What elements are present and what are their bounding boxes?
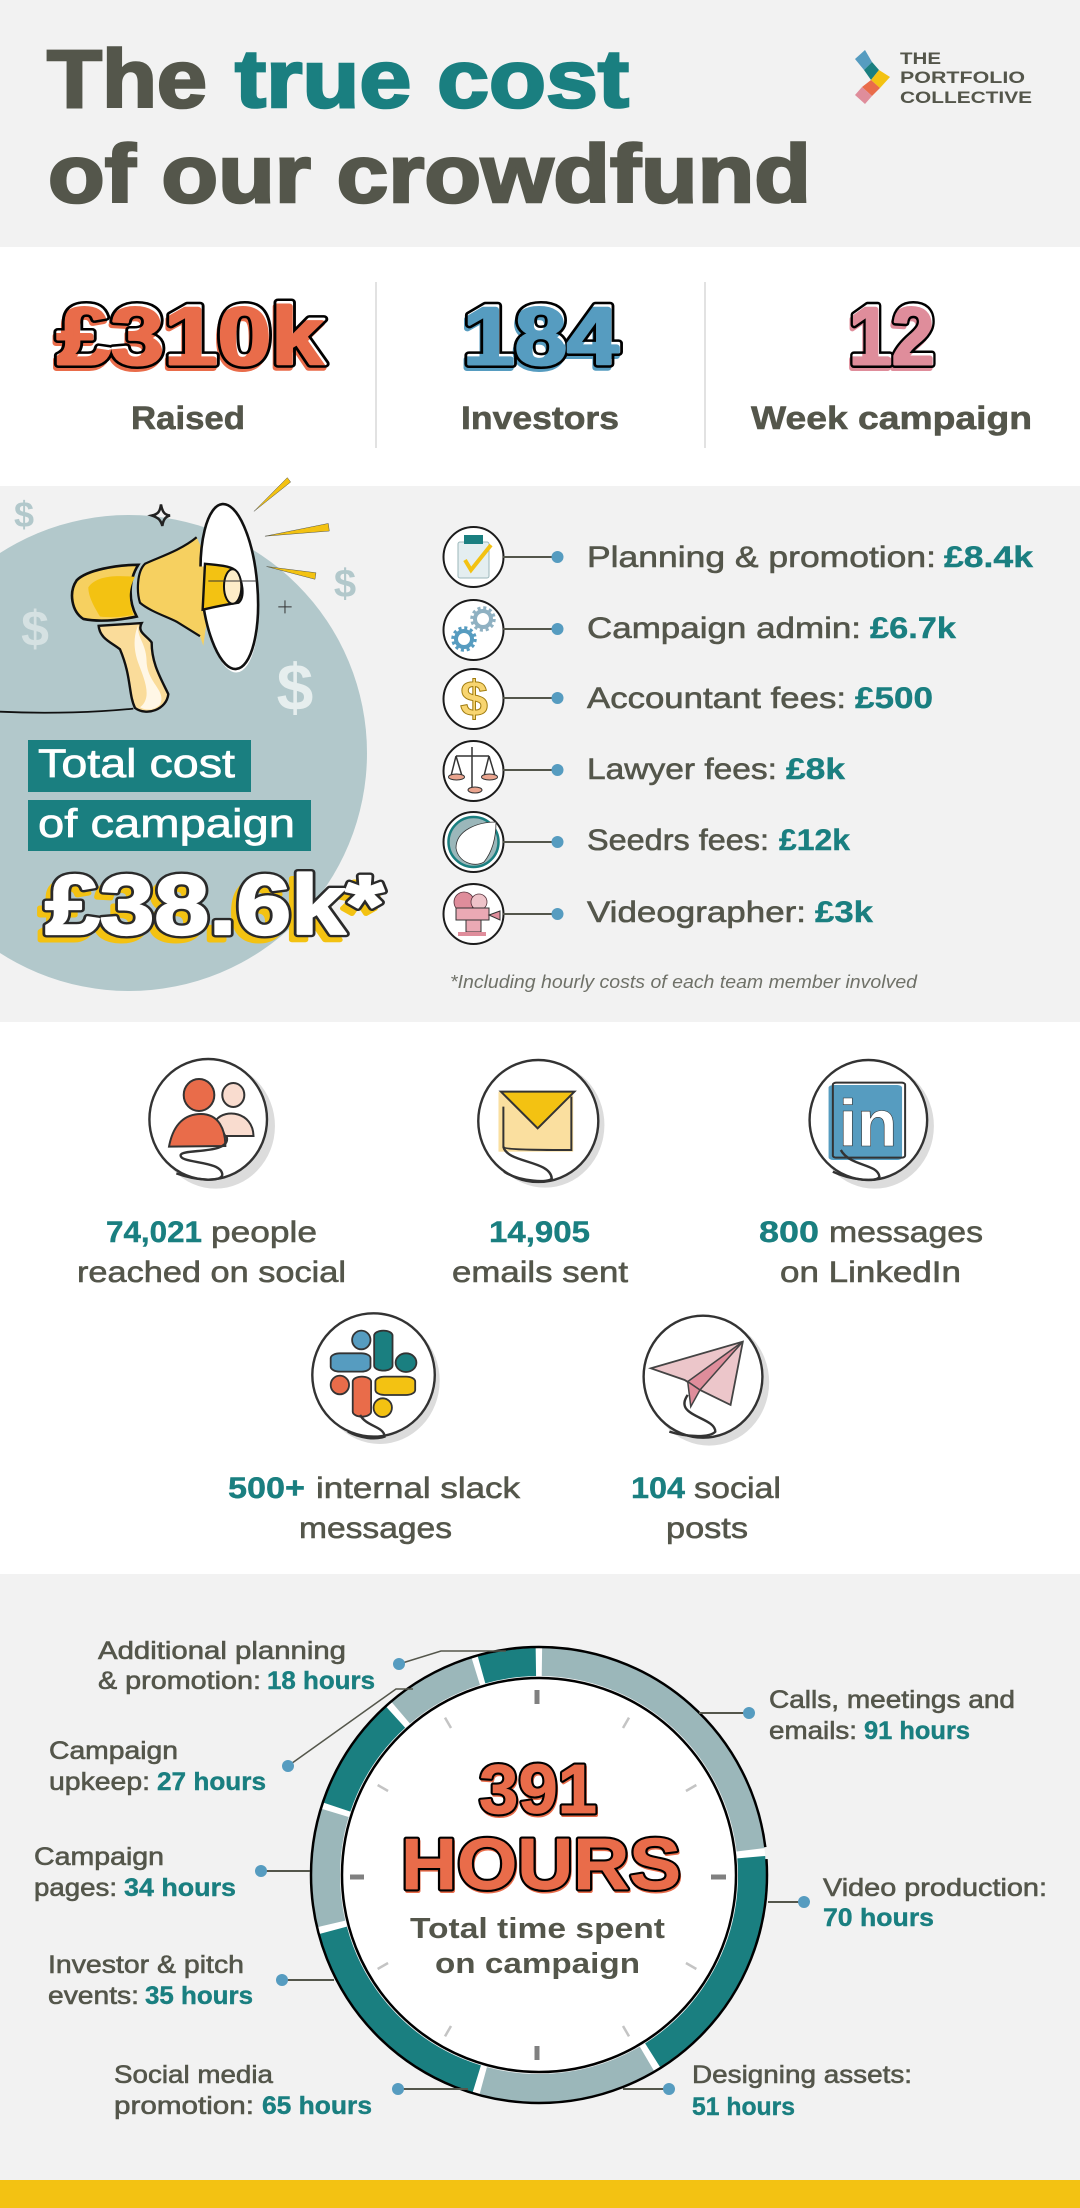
list: lawyer fees: Lawyer fees: xyxy=(587,753,777,786)
logo: The Portfolio Collective xyxy=(855,49,1032,107)
stat: weeks: 12 xyxy=(847,292,933,386)
list: accountant fees xyxy=(444,669,933,729)
icon: dollar xyxy=(444,669,504,729)
stat text: social posts: 104 xyxy=(631,1472,685,1505)
title: The xyxy=(47,34,207,125)
stat: investors xyxy=(380,270,700,436)
icon: people xyxy=(149,1059,275,1189)
label: investor events 35 hours: 35 hours xyxy=(145,1982,253,2010)
label: additional planning 18 hours xyxy=(98,1637,506,1695)
icon: paper plane xyxy=(644,1316,769,1446)
icon: email xyxy=(478,1060,604,1188)
label: campaign pages 34 hours: Campaign xyxy=(34,1843,164,1871)
label: additional planning 18 hours: & promotion: xyxy=(98,1667,261,1695)
stat text: slack: messages xyxy=(299,1512,452,1545)
label: social media 65 hours: Social media xyxy=(114,2061,273,2089)
logo: The Portfolio Collective: THE xyxy=(900,49,941,68)
stat: investors: 184 xyxy=(461,292,617,386)
list: campaign admin: £6.7k xyxy=(870,612,956,645)
label: social media 65 hours: 65 hours xyxy=(262,2092,372,2120)
label: social media 65 hours xyxy=(114,2061,468,2120)
list: campaign admin: Campaign admin: xyxy=(587,612,861,645)
list: planning & promotion: Planning & promotion: xyxy=(587,541,936,574)
title: of our crowdfund xyxy=(48,129,811,220)
stat text: people reached: 74,021 xyxy=(106,1216,202,1249)
list: campaign admin xyxy=(444,600,956,660)
list: videographer xyxy=(444,884,873,944)
label: investor events 35 hours: Investor & pitch xyxy=(48,1951,244,1979)
stat text: people reached xyxy=(77,1216,346,1289)
dollar signs xyxy=(14,494,356,724)
list: videographer: Videographer: xyxy=(587,896,806,929)
label: designing 51 hours xyxy=(623,2061,912,2121)
label: campaign upkeep 27 hours: upkeep: xyxy=(49,1768,150,1796)
list: lawyer fees: £8k xyxy=(786,753,845,786)
icon: slack xyxy=(312,1313,440,1444)
label: social media 65 hours: promotion: xyxy=(114,2092,254,2120)
stat text: slack xyxy=(228,1472,521,1545)
icon: seedrs xyxy=(444,812,504,872)
clock centre text: 391 xyxy=(479,1750,597,1828)
logo: The Portfolio Collective: COLLECTIVE xyxy=(900,88,1032,107)
stat text: linkedin: on LinkedIn xyxy=(780,1256,961,1289)
label: campaign upkeep 27 hours: Campaign xyxy=(49,1737,178,1765)
footnote: *Including hourly costs of each team member involved xyxy=(450,972,918,992)
icon: clipboard xyxy=(444,527,504,587)
stat: weeks xyxy=(750,301,1030,436)
clock centre text: 391 xyxy=(480,1752,598,1830)
label: additional planning 18 hours: 18 hours xyxy=(267,1667,375,1695)
label: total cost: Total cost xyxy=(38,742,235,786)
total cost figure: £38.6k* xyxy=(39,864,378,958)
dollar signs: $ xyxy=(14,494,34,535)
label: designing 51 hours: 51 hours xyxy=(692,2093,795,2121)
title xyxy=(47,34,811,220)
list: accountant fees: £500 xyxy=(855,682,933,715)
stat: investors: Investors xyxy=(461,400,619,436)
list: lawyer fees xyxy=(444,741,845,801)
label: campaign pages 34 hours xyxy=(34,1843,310,1902)
dollar signs: $ xyxy=(277,650,313,724)
label: campaign pages 34 hours: 34 hours xyxy=(124,1874,236,1902)
list: seedrs fees: £12k xyxy=(779,824,850,857)
stat: raised: £310k xyxy=(55,292,323,386)
stat text: social posts xyxy=(631,1472,781,1545)
label: additional planning 18 hours: Additional planning xyxy=(98,1637,346,1665)
list: videographer: £3k xyxy=(815,896,873,929)
label: designing 51 hours: Designing assets: xyxy=(692,2061,912,2089)
stat text: emails: emails sent xyxy=(452,1256,629,1289)
list: planning & promotion xyxy=(444,527,1033,587)
icon: linkedin: in xyxy=(839,1086,897,1160)
stat text: people reached: reached on social xyxy=(77,1256,346,1289)
label: campaign upkeep 27 hours xyxy=(49,1689,413,1796)
total cost figure: £38.6k* xyxy=(45,858,384,952)
label: total cost xyxy=(28,740,311,851)
label: video 70 hours: 70 hours xyxy=(823,1904,934,1932)
stat text: emails xyxy=(452,1216,629,1289)
stat text: social posts: posts xyxy=(666,1512,748,1545)
stat: raised: Raised xyxy=(131,400,245,436)
total cost figure: £38.6k* xyxy=(45,858,384,952)
clock centre text: HOURS xyxy=(401,1825,681,1905)
list: seedrs fees xyxy=(444,812,850,872)
logo: The Portfolio Collective: PORTFOLIO xyxy=(900,68,1025,87)
label: video 70 hours xyxy=(768,1874,1047,1932)
stat text: slack: internal slack xyxy=(316,1472,521,1505)
label: calls 91 hours xyxy=(699,1686,1015,1745)
icon: gears xyxy=(444,600,504,660)
stat: weeks: Week campaign xyxy=(751,400,1032,436)
stat text: slack: 500+ xyxy=(228,1472,305,1505)
icon: megaphone xyxy=(0,478,329,713)
list: accountant fees: Accountant fees: xyxy=(587,682,846,715)
title: true cost xyxy=(235,34,629,125)
label: calls 91 hours: emails: xyxy=(769,1717,857,1745)
clock centre text: Total time spent xyxy=(410,1913,665,1945)
icon: film camera xyxy=(444,884,504,944)
label: calls 91 hours: 91 hours xyxy=(864,1717,970,1745)
stat text: people reached: people xyxy=(211,1216,317,1249)
label: investor events 35 hours xyxy=(48,1951,334,2010)
list: planning & promotion: £8.4k xyxy=(944,541,1033,574)
label: campaign pages 34 hours: pages: xyxy=(34,1874,117,1902)
label: investor events 35 hours: events: xyxy=(48,1982,139,2010)
chart: hours clock ring xyxy=(311,1647,767,2103)
stat text: linkedin xyxy=(759,1216,983,1289)
icon: dollar: $ xyxy=(460,671,488,727)
label: campaign upkeep 27 hours: 27 hours xyxy=(157,1768,266,1796)
clock centre text xyxy=(401,1750,682,1980)
clock centre text: on campaign xyxy=(435,1948,640,1980)
clock centre text: 391 xyxy=(479,1750,597,1828)
label: calls 91 hours: Calls, meetings and xyxy=(769,1686,1015,1714)
dollar signs: $ xyxy=(21,601,49,657)
panel: total cost circle xyxy=(0,515,367,991)
label: video 70 hours: Video production: xyxy=(823,1874,1047,1902)
list: seedrs fees: Seedrs fees: xyxy=(587,824,769,857)
icon: linkedin xyxy=(810,1060,934,1189)
label: total cost: of campaign xyxy=(38,802,295,846)
stat text: linkedin: 800 xyxy=(759,1216,819,1249)
stat: raised xyxy=(0,270,370,436)
stat text: emails: 14,905 xyxy=(489,1216,590,1249)
stat text: linkedin: messages xyxy=(829,1216,983,1249)
dollar signs: $ xyxy=(334,562,356,606)
clock centre text: HOURS xyxy=(401,1825,681,1905)
clock centre text: HOURS xyxy=(402,1827,682,1907)
footer bar xyxy=(0,2180,1080,2208)
stat text: social posts: social xyxy=(694,1472,781,1505)
icon: scales xyxy=(444,741,504,801)
